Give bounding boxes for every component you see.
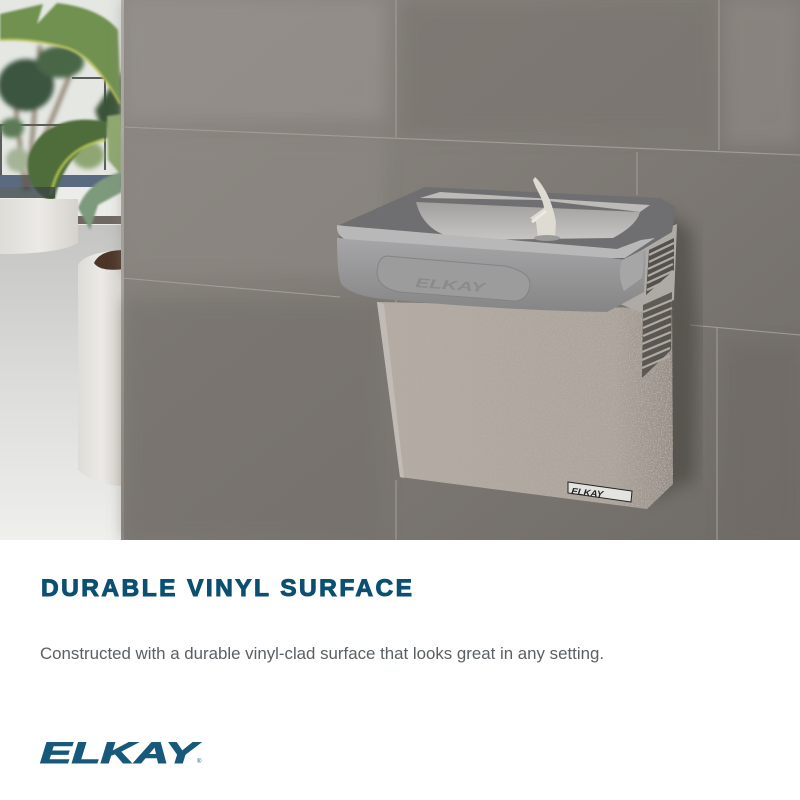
fountain: front apron	[337, 238, 646, 312]
background: window and room	[0, 0, 124, 260]
fountain: side housing and vents	[610, 224, 677, 378]
fountain: top rim	[337, 187, 676, 260]
body text: Constructed with a durable vinyl-clad surface that looks great in any setting.	[40, 645, 604, 663]
plant: large banana leaves	[0, 3, 122, 230]
heading: DURABLE VINYL SURFACE	[41, 575, 412, 602]
photo: lobby with wall-mounted drinking fountain	[0, 0, 800, 540]
wall shading	[124, 0, 800, 540]
fountain	[337, 177, 677, 509]
fountain: side push button	[620, 250, 644, 291]
fountain: rim lip	[337, 225, 655, 258]
planters	[0, 187, 124, 486]
fountain: vinyl body	[377, 300, 673, 509]
white caption area	[0, 540, 800, 800]
Elkay logo: ®	[197, 758, 202, 765]
wall tile joints	[122, 0, 800, 540]
fountain shadow	[650, 210, 698, 500]
Elkay logo: ELKAY	[40, 737, 201, 770]
wall edge highlight	[121, 0, 124, 540]
fountain: bubbler spout	[530, 177, 560, 241]
fountain: model plate	[568, 482, 632, 502]
wall	[122, 0, 800, 540]
Elkay logo	[40, 737, 202, 770]
fountain: model plate: ELKAY	[571, 486, 605, 499]
fountain: front push bar with logo	[377, 256, 530, 301]
fountain: front push bar with logo: ELKAY	[415, 275, 488, 295]
plant: tree foliage	[0, 45, 122, 190]
floor	[0, 225, 124, 540]
fountain: bowl	[416, 202, 640, 240]
